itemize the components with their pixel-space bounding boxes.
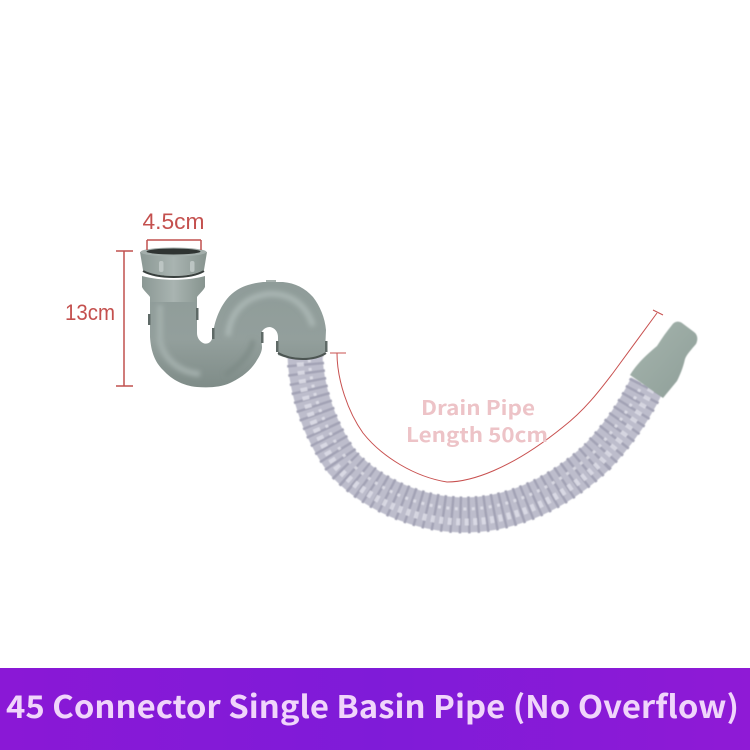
pipe highlights [160,294,313,375]
bottom banner [0,668,750,750]
hose end connector [630,322,697,398]
dimension: height 13cm: 13cm [65,300,115,325]
drain pipe length label: Drain Pipe [421,392,535,421]
trap clips [148,280,328,352]
dimension: opening width 4.5cm: 4.5cm [142,209,204,234]
dimension: height 13cm [65,251,133,386]
S-trap pipe [150,282,326,387]
corrugated drain hose [300,355,652,522]
lower collar [142,276,205,302]
dimension: opening width 4.5cm [142,209,204,250]
top nut [140,248,207,277]
drain pipe length label [406,392,548,448]
drain pipe length label: Length 50cm [406,419,548,448]
trap joint band [278,353,326,359]
dimension: drain pipe length curve [330,310,663,482]
banner title: 45 Connector Single Basin Pipe (No Overflow) [6,682,739,727]
